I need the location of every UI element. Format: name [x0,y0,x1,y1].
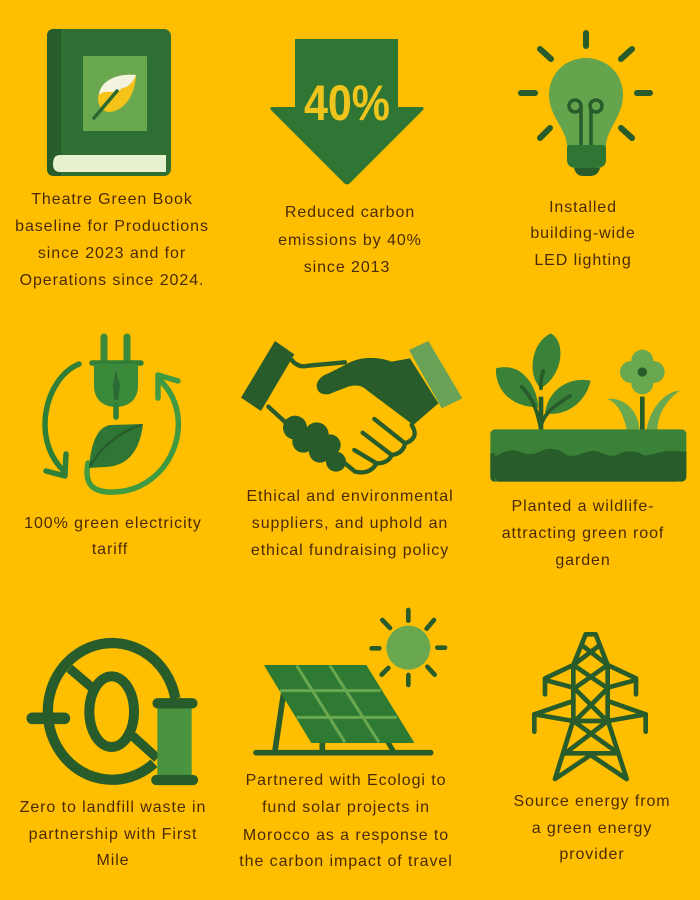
icon: light bulb [521,33,650,176]
text: installed LED: LED lighting [534,252,632,269]
text: Ecologi partnership: Partnered with Ecologi to [246,772,446,789]
text: zero to landfill: partnership with First [29,826,197,843]
text: reduced carbon: since 2013 [304,259,390,276]
icon: plug, leaf and recycling arrows [45,337,178,492]
text: reduced carbon: Reduced carbon [285,204,415,221]
icon: plants on green roof [490,333,686,482]
icon: zero to landfill spool [32,643,193,780]
icon: down arrow with 40% [270,39,424,184]
text: green electricity: 100% green electricity [24,515,202,532]
text: green roof garden: garden [555,552,611,569]
text: Theatre Green Book: baseline for Productions [15,218,209,235]
icon: green book [47,29,171,176]
text: Ecologi partnership: Morocco as a response to [243,827,449,844]
text: Theatre Green Book: Theatre Green Book [31,191,193,208]
text: ethical suppliers: suppliers, and uphold an [252,515,448,532]
text: green energy provider: Source energy from [513,793,671,810]
text: installed LED: Installed [549,199,617,216]
icon: down arrow with 40%: 40% [304,75,390,131]
text: green energy provider: a green energy [532,820,652,837]
text: zero to landfill: Zero to landfill waste in [20,799,206,816]
text: green roof garden: Planted a wildlife- [512,498,654,515]
icon: solar panel and sun [256,610,445,753]
text: zero to landfill: Mile [96,852,130,869]
text: installed LED: building-wide [530,225,636,242]
text: green roof garden: attracting green roof [502,525,664,542]
text: green energy provider: provider [559,846,625,863]
icon: handshake [241,341,462,472]
icon: electricity pylon [534,634,646,779]
text: reduced carbon: emissions by 40% [278,232,422,249]
text: green electricity: tariff [92,541,128,558]
text: ethical suppliers: ethical fundraising policy [251,542,449,559]
text: Ecologi partnership: fund solar projects in [262,799,430,816]
text: Theatre Green Book: Operations since 2024. [20,272,204,289]
text: Ecologi partnership: the carbon impact of travel [239,853,453,870]
text: Theatre Green Book: since 2023 and for [38,245,186,262]
text: ethical suppliers: Ethical and environmental [246,488,454,505]
